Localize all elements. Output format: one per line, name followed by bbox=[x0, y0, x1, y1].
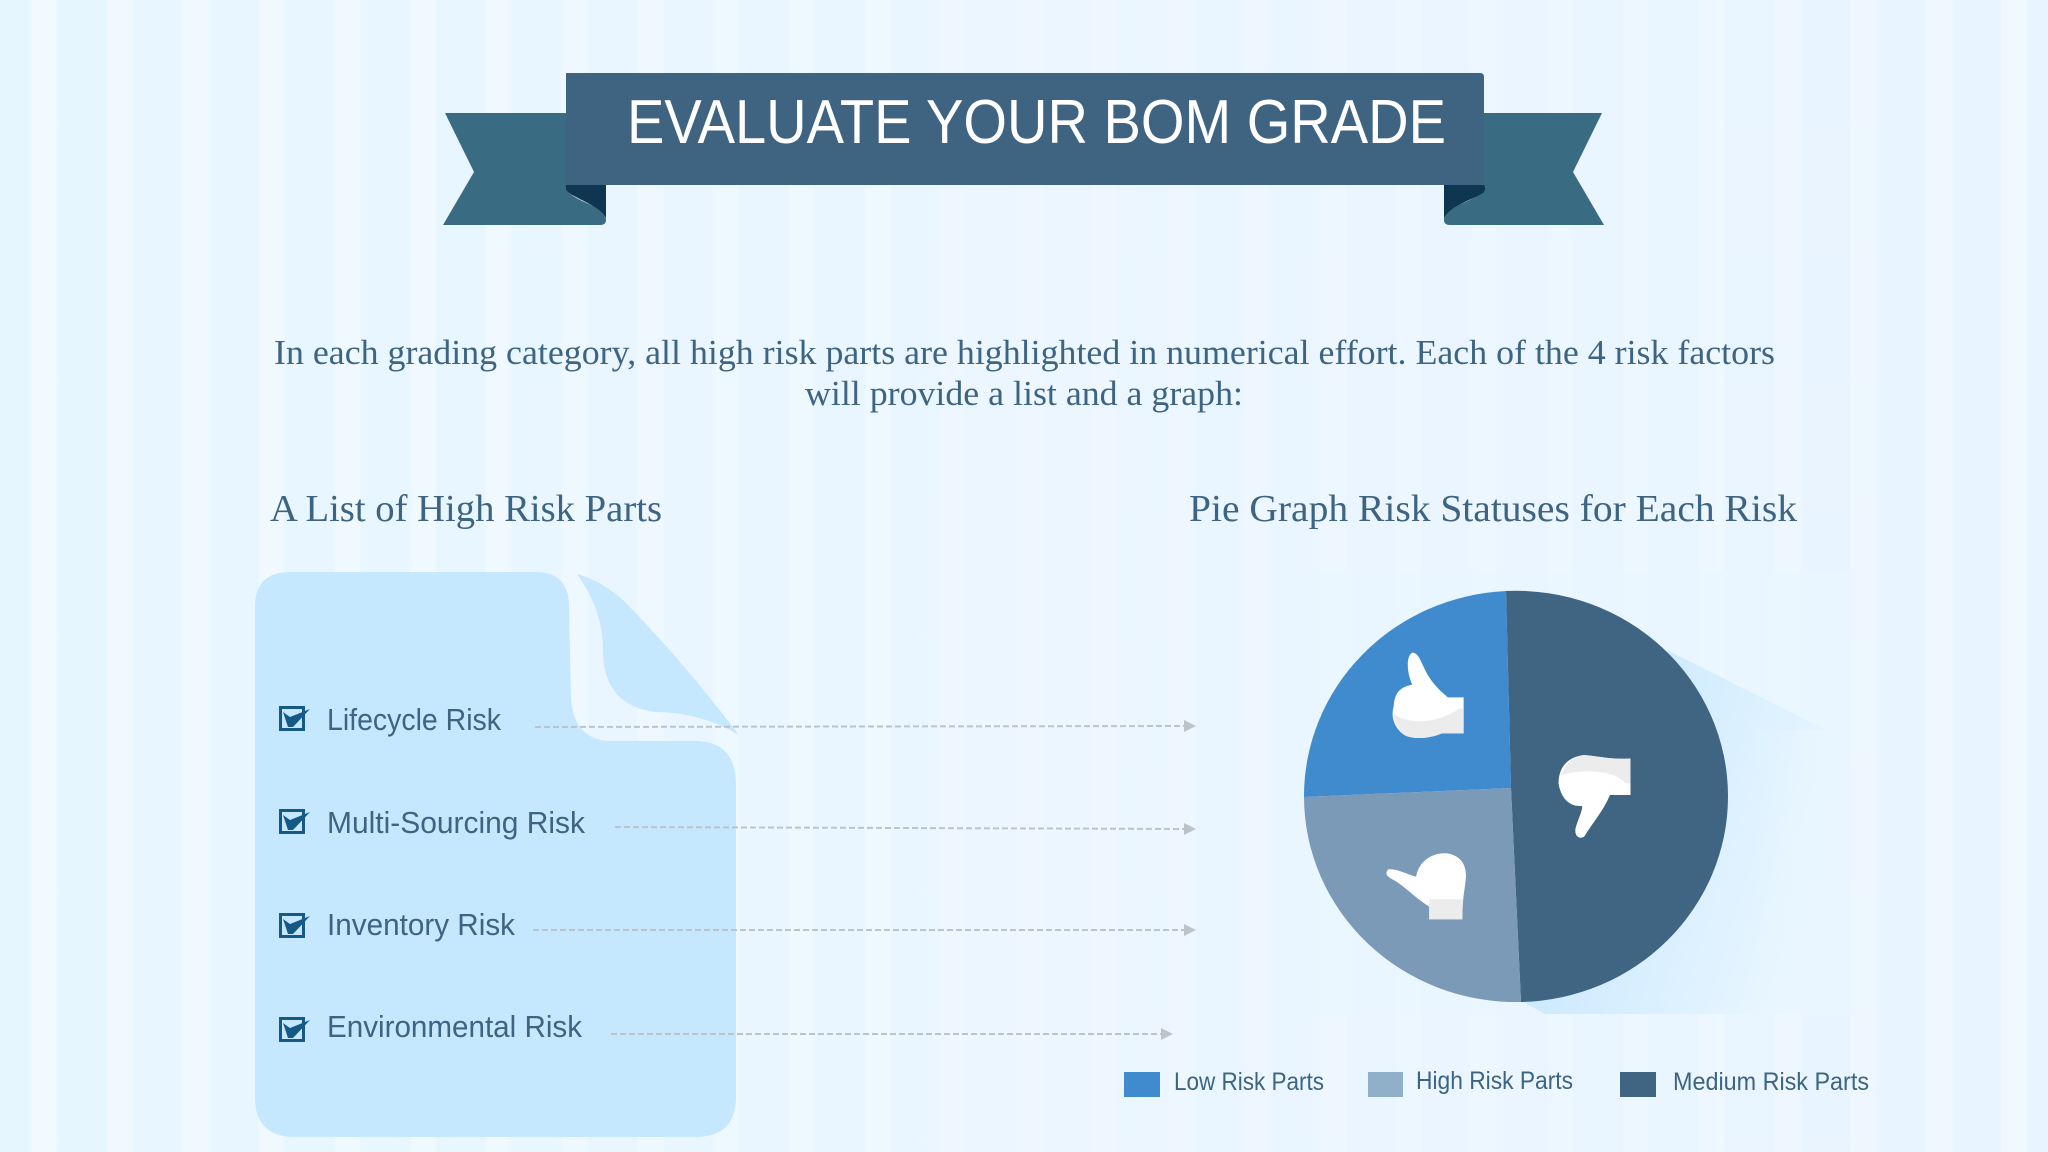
intro paragraph bbox=[274, 334, 1775, 413]
icon: thumb down bbox=[1559, 755, 1630, 838]
legend: low risk: Low Risk Parts bbox=[1174, 1068, 1324, 1096]
item: inventory risk: Inventory Risk bbox=[327, 907, 515, 942]
item: lifecycle risk: Lifecycle Risk bbox=[327, 702, 501, 737]
document page curl bbox=[577, 574, 739, 735]
legend: high risk: High Risk Parts bbox=[1416, 1067, 1573, 1095]
intro paragraph: will provide a list and a graph: bbox=[805, 375, 1243, 413]
arrow: lifecycle bbox=[535, 720, 1196, 732]
background bbox=[32, 0, 184, 1152]
slice: high risk bbox=[1304, 788, 1521, 1002]
title: EVALUATE YOUR BOM GRADE bbox=[627, 88, 1446, 157]
legend: high risk bbox=[1368, 1067, 1573, 1097]
arrow: environmental bbox=[611, 1028, 1173, 1040]
legend bbox=[1124, 1067, 1869, 1097]
arrow: multi-sourcing bbox=[615, 823, 1196, 835]
banner body bbox=[566, 73, 1484, 185]
icon: thumb up bbox=[1393, 653, 1464, 738]
heading: pie graph: Pie Graph Risk Statuses for Each Risk bbox=[1189, 488, 1798, 530]
icon: thumb sideways bbox=[1386, 853, 1466, 919]
item: environmental risk: Environmental Risk bbox=[327, 1009, 582, 1044]
slice: low risk bbox=[1304, 591, 1511, 797]
arrow: inventory bbox=[533, 924, 1196, 936]
left fold bbox=[566, 185, 606, 218]
pie long shadow bbox=[1520, 650, 1850, 1015]
panel: document list bbox=[255, 572, 739, 1137]
item: multi-sourcing risk: Multi-Sourcing Risk bbox=[327, 805, 585, 840]
right ribbon tail bbox=[1444, 113, 1604, 225]
slice: medium risk bbox=[1506, 591, 1728, 1002]
legend: medium risk: Medium Risk Parts bbox=[1673, 1068, 1869, 1096]
right fold bbox=[1444, 185, 1485, 218]
legend: low risk bbox=[1124, 1068, 1324, 1097]
title banner bbox=[443, 73, 1604, 225]
left ribbon tail bbox=[443, 113, 606, 225]
intro paragraph: In each grading category, all high risk parts are highlighted in numerical effort. Each of the 4 risk factors bbox=[274, 334, 1775, 372]
heading: high risk list: A List of High Risk Parts bbox=[270, 488, 662, 530]
document shape bbox=[255, 572, 736, 1137]
pie chart bbox=[1304, 591, 1850, 1015]
